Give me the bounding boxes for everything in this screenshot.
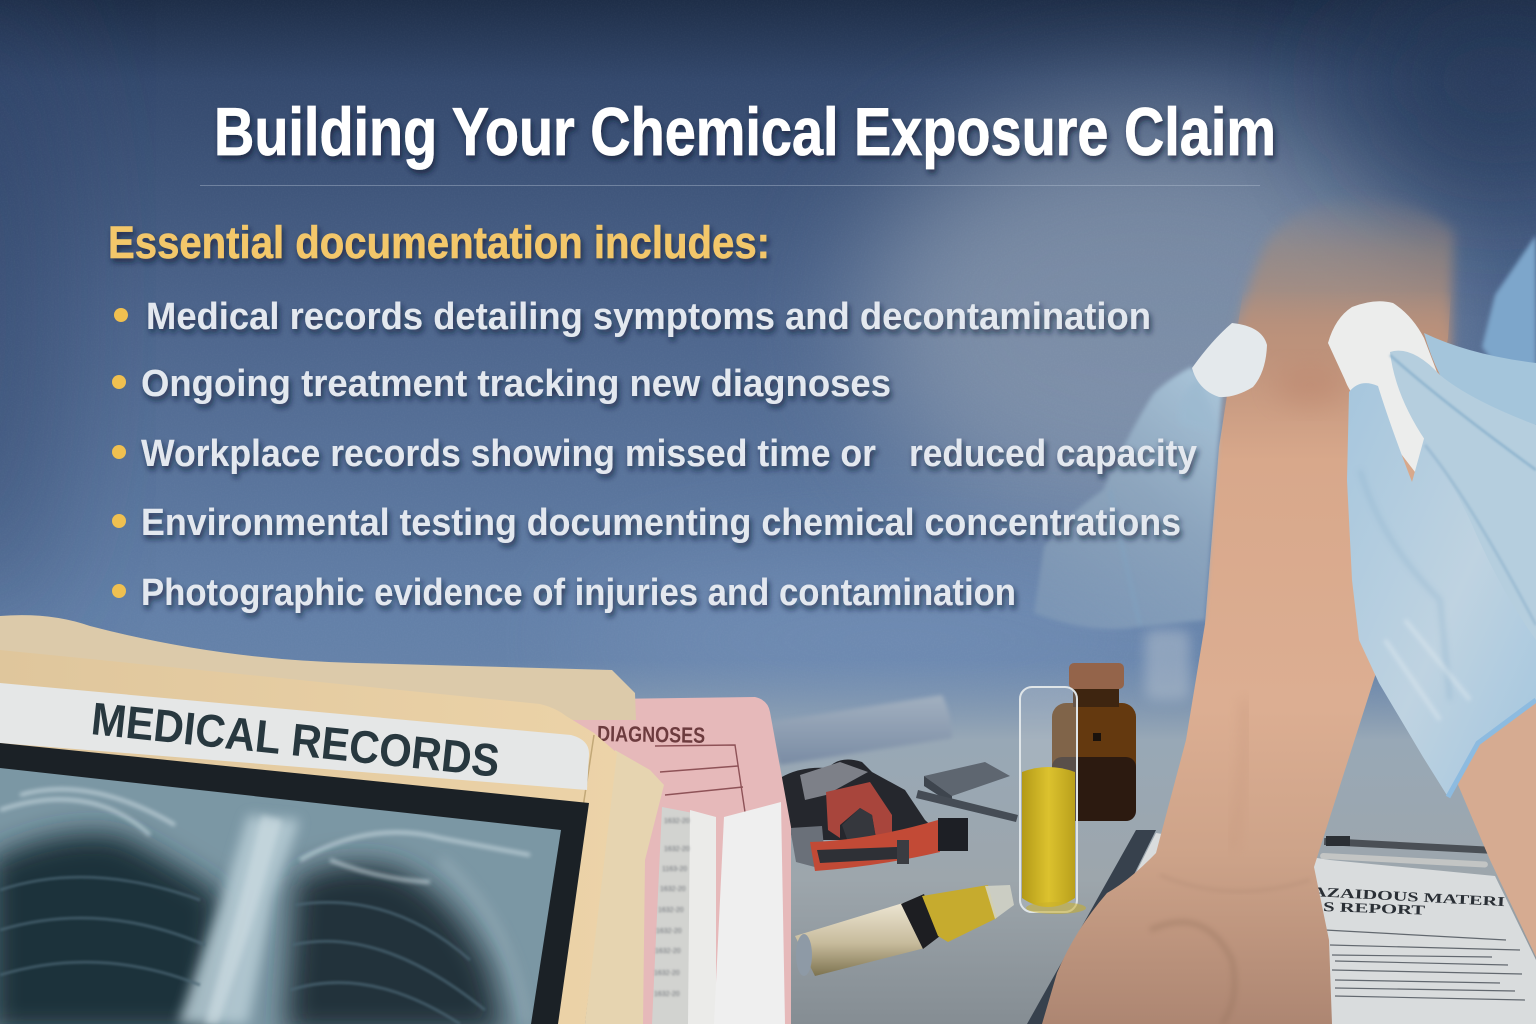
folder label: diagnoses: DIAGNOSES bbox=[597, 721, 705, 748]
paper line codes: 1632-20 bbox=[664, 846, 690, 853]
desk surface bbox=[0, 660, 1536, 1024]
cotton swab in left glove bbox=[1192, 323, 1267, 397]
front manila folder bbox=[0, 650, 617, 1024]
bullet list bbox=[112, 296, 1197, 614]
folder stack bbox=[0, 615, 791, 1024]
test tube with yellow liquid bbox=[1020, 687, 1086, 914]
paper line codes: 1632-20 bbox=[655, 948, 681, 955]
back tan folder bbox=[0, 615, 636, 720]
clipboard and report bbox=[1027, 830, 1536, 1024]
upper right sleeve bbox=[1482, 235, 1536, 420]
report subtitle: S REPORT bbox=[1323, 899, 1425, 918]
report title: AZAIDOUS MATERI bbox=[1312, 884, 1505, 909]
paper line codes: 1163-20 bbox=[662, 866, 687, 873]
paper line codes: 1632-20 bbox=[654, 970, 680, 977]
medical records label strip: MEDICAL RECORDS bbox=[89, 692, 502, 787]
clipboard clip bbox=[1320, 836, 1488, 868]
bullet 3: Workplace records showing missed time or bbox=[141, 433, 876, 475]
bullet 4: Environmental testing documenting chemical concentrations bbox=[141, 502, 1181, 544]
report text lines bbox=[1325, 930, 1525, 1000]
bullet 5: Photographic evidence of injuries and contamination bbox=[141, 572, 1016, 614]
paper line codes: 1632-20 bbox=[654, 991, 680, 998]
paper line codes: 1632-20 bbox=[664, 818, 690, 825]
chest x-ray bbox=[0, 760, 570, 1024]
paper line codes: 1632-20 bbox=[658, 907, 684, 914]
left faded glove bbox=[1034, 323, 1267, 629]
paper line codes bbox=[654, 818, 690, 998]
bullet 1: Medical records detailing symptoms and decontamination bbox=[146, 296, 1151, 338]
pink diagnoses folder bbox=[536, 697, 791, 1024]
blurred glassware behind bbox=[1145, 630, 1190, 700]
gauze pad bbox=[1328, 301, 1440, 485]
x-ray black frame bbox=[0, 743, 589, 1024]
gray cylinder on desk bbox=[772, 695, 952, 765]
medical records label strip bbox=[0, 683, 589, 790]
second tan folder bbox=[585, 750, 664, 1024]
white papers bbox=[652, 802, 785, 1024]
paper line codes: 1632-20 bbox=[660, 886, 686, 893]
right glove hand bbox=[1328, 301, 1536, 797]
divider bbox=[200, 185, 1260, 186]
paper line codes: 1632-20 bbox=[656, 928, 682, 935]
form grid bbox=[655, 745, 745, 812]
brown bottle bbox=[1052, 663, 1136, 821]
safety goggles bbox=[780, 760, 968, 871]
subheading: Essential documentation includes: bbox=[108, 217, 770, 268]
arm being wiped bbox=[1042, 196, 1454, 1024]
title: Building Your Chemical Exposure Claim bbox=[214, 94, 1276, 170]
bullet 3: reduced capacity bbox=[909, 433, 1197, 475]
gray block and pen bbox=[916, 762, 1018, 822]
bullet 2: Ongoing treatment tracking new diagnoses bbox=[141, 363, 891, 405]
second forearm bbox=[1453, 698, 1536, 957]
fallen vial bbox=[795, 885, 1014, 976]
